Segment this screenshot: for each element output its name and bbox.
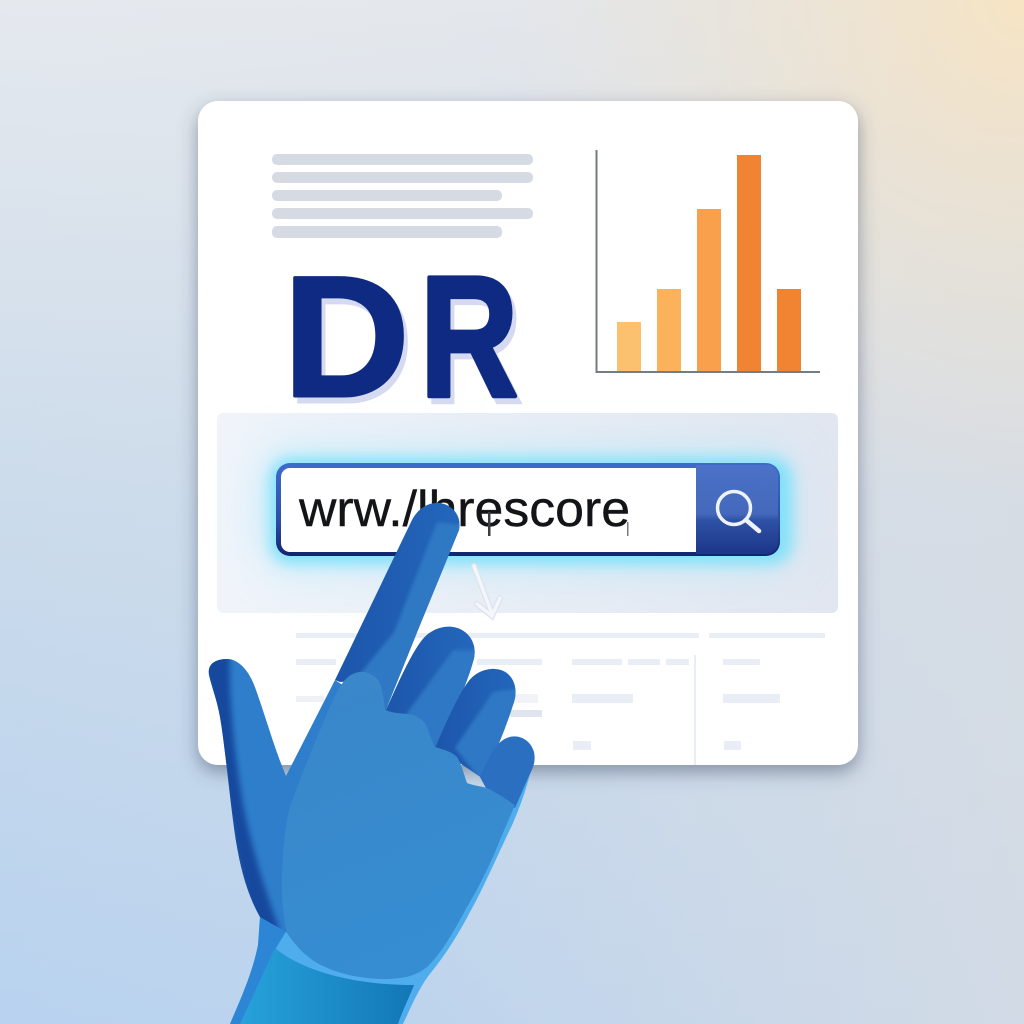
icon: pointing hand bbox=[200, 495, 535, 1024]
wrist bbox=[240, 948, 414, 1024]
ring finger bbox=[436, 668, 516, 777]
outer rim and cuff bbox=[230, 762, 533, 1024]
heading: DR: D bbox=[283, 241, 410, 433]
url text: wrw./lhrescore bbox=[298, 481, 630, 537]
palm bbox=[282, 672, 515, 979]
cuff left strip bbox=[230, 917, 290, 1024]
table placeholder bbox=[296, 633, 825, 765]
thumb bbox=[208, 659, 342, 932]
middle finger bbox=[386, 626, 475, 748]
search box glow bbox=[270, 458, 792, 564]
search box wide glow bbox=[262, 450, 792, 568]
bar chart bbox=[596, 150, 820, 372]
search box bbox=[276, 463, 780, 556]
small arrow bbox=[474, 566, 500, 616]
heading: DR: R bbox=[420, 241, 518, 433]
search band bbox=[217, 413, 838, 616]
text placeholder lines bbox=[272, 154, 533, 238]
panel: document card bbox=[198, 101, 858, 765]
search button bbox=[696, 465, 778, 554]
heading: DR: D bbox=[287, 247, 414, 439]
heading: DR: R bbox=[424, 247, 522, 439]
little finger bbox=[480, 736, 535, 808]
heading: DR bbox=[283, 241, 522, 439]
text glitch strokes bbox=[488, 512, 628, 536]
index finger bbox=[335, 502, 460, 710]
